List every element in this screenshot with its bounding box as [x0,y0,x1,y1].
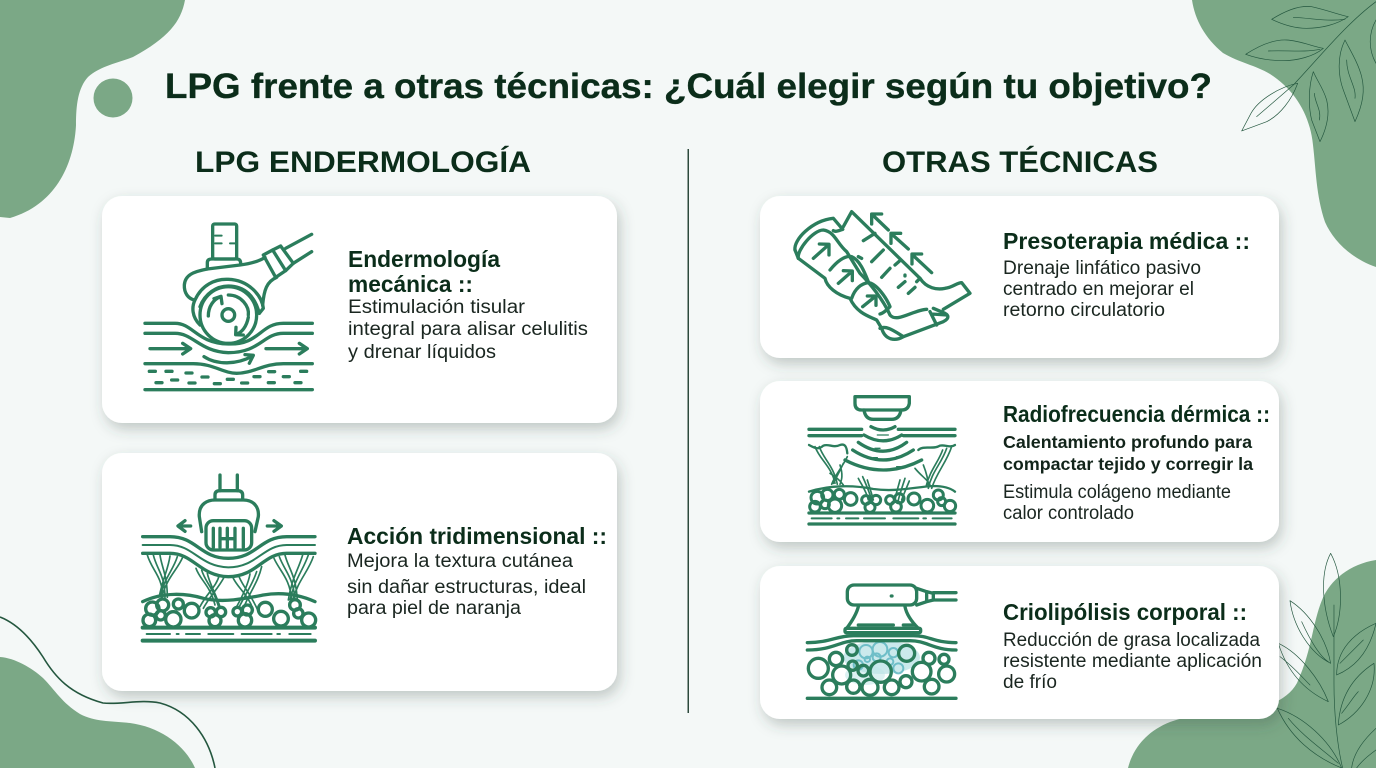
card background [102,453,617,691]
panel: acción tridimensional [102,453,617,691]
decorative curve: bottom left [0,617,215,768]
card description: y drenar líquidos [348,342,496,363]
panel: endermología mecánica [102,196,617,423]
card heading: Criolipólisis corporal :: [1003,599,1247,625]
card subheading [1003,432,1253,474]
card description: de frío [1003,672,1057,693]
card background [760,566,1279,719]
icon: criolipólisis [807,585,956,698]
card heading: mecánica :: [348,271,473,297]
card description: retorno circulatorio [1003,300,1165,321]
card description: Mejora la textura cutánea [347,551,573,572]
cold bubbles [843,641,920,685]
column heading: otras técnicas: OTRAS TÉCNICAS [882,145,1158,179]
card description [1003,482,1231,524]
card subheading: Calentamiento profundo para [1003,432,1252,452]
card heading: Radiofrecuencia dérmica :: [1003,401,1270,427]
card heading [348,246,501,297]
icon: radiofrecuencia [809,397,956,524]
card description: sin dañar estructuras, ideal [347,577,586,598]
card heading: Presoterapia médica :: [1003,228,1250,254]
card background [760,381,1279,542]
column divider [688,149,689,713]
card heading: Endermología [348,246,501,272]
decorative circle: top left [94,78,132,118]
leaf branch: top right [1242,2,1376,142]
card description [347,551,586,619]
card background [102,196,617,423]
card description [348,297,588,363]
icon: rodillo sobre piel [145,224,312,390]
decorative blob: top right [1192,0,1376,267]
card description: Estimulación tisular [348,297,526,318]
card description: resistente mediante aplicación [1003,651,1262,672]
decorative blob: bottom left [0,657,195,768]
card background [760,196,1279,358]
card description [1003,630,1262,693]
column heading: LPG: LPG ENDERMOLOGÍA [195,145,531,179]
card description: Drenaje linfático pasivo [1003,258,1201,279]
card subheading: compactar tejido y corregir la [1003,454,1253,474]
card description: Estimula colágeno mediante [1003,482,1231,503]
icon: botas de presoterapia [795,212,970,339]
card description: para piel de naranja [347,598,521,619]
decorative blob: bottom right [1128,560,1376,768]
panel: criolipólisis corporal [760,566,1279,719]
icon: cabezal sobre tejido [143,475,316,641]
panel: radiofrecuencia dérmica [760,381,1279,542]
card description: centrado en mejorar el [1003,279,1194,300]
card description [1003,258,1201,321]
decorative blob: top left [0,0,185,218]
panel: presoterapia médica [760,196,1279,358]
card heading: Acción tridimensional :: [347,523,607,549]
leaf branch: bottom right [1277,553,1376,768]
card description: integral para alisar celulitis [348,319,588,340]
card description: Reducción de grasa localizada [1003,630,1260,651]
title: LPG frente a otras técnicas: ¿Cuál elegir según tu objetivo? [165,67,1212,106]
card description: calor controlado [1003,503,1134,524]
